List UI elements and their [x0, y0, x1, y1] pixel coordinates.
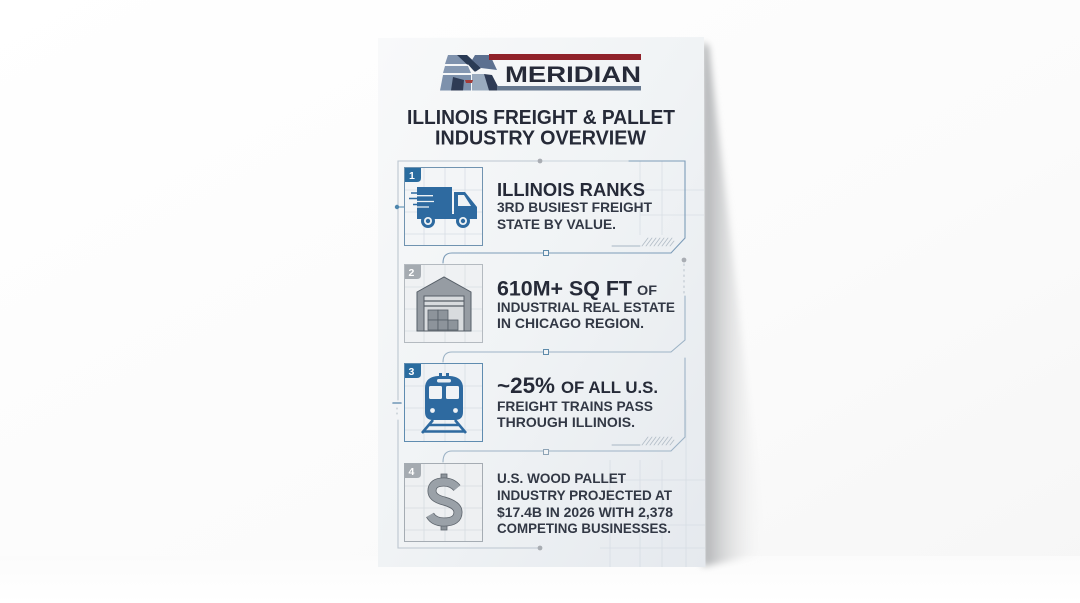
- circuit frame: [393, 161, 685, 548]
- text block 3: FREIGHT TRAINS PASS: [497, 398, 653, 414]
- text block 2: [497, 276, 675, 331]
- text block 2: INDUSTRIAL REAL ESTATE: [497, 299, 675, 315]
- badge 1: 1: [409, 170, 415, 182]
- icon: warehouse: [417, 277, 471, 331]
- icon: truck: [409, 187, 477, 228]
- panel 1: freight state: [404, 168, 652, 246]
- text block 2: IN CHICAGO REGION.: [497, 315, 644, 331]
- icon box 2: [404, 264, 482, 342]
- text block 1: ILLINOIS RANKS: [497, 179, 645, 200]
- icon: train: [422, 373, 466, 433]
- panel 2: real estate: [404, 264, 675, 342]
- text block 4: U.S. WOOD PALLET: [497, 470, 626, 486]
- icon: dollar sign: [430, 474, 458, 530]
- text block 4: COMPETING BUSINESSES.: [497, 520, 671, 536]
- logo: [440, 54, 641, 90]
- text block 3: ~25%: [497, 373, 555, 398]
- text block 4: $17.4B IN 2026 WITH 2,378: [497, 504, 673, 520]
- badge 4: 4: [408, 466, 414, 478]
- text block 4: INDUSTRY PROJECTED AT: [497, 487, 672, 503]
- logo red bar: [489, 54, 641, 60]
- panel 4: wood pallet: [404, 464, 673, 542]
- text block 3: OF ALL U.S.: [561, 378, 658, 397]
- text block 2: 610M+ SQ FT: [497, 276, 632, 300]
- text block 3: THROUGH ILLINOIS.: [497, 414, 635, 430]
- title: ILLINOIS FREIGHT & PALLET: [407, 106, 675, 129]
- poster shadow: [702, 42, 765, 566]
- title: INDUSTRY OVERVIEW: [435, 126, 647, 150]
- badge 2: 2: [408, 267, 414, 279]
- icon box 1: [404, 168, 482, 246]
- text block 3: [497, 373, 658, 430]
- frame nodes: [395, 159, 686, 550]
- logo mark: [440, 55, 500, 90]
- panel 3: freight trains: [404, 364, 658, 442]
- text block 1: 3RD BUSIEST FREIGHT: [497, 199, 652, 215]
- text block 2: OF: [637, 282, 657, 298]
- floor: [0, 556, 1080, 603]
- icon box 3: [404, 364, 482, 442]
- badge 3: 3: [408, 366, 414, 378]
- poster: [378, 37, 706, 567]
- icon box 4: [404, 464, 482, 542]
- text block 4: [497, 470, 673, 536]
- text block 1: STATE BY VALUE.: [497, 216, 616, 232]
- logo wordmark: MERIDIAN: [505, 62, 641, 87]
- logo blue bar: [497, 86, 641, 90]
- title: [407, 106, 675, 150]
- text block 1: [497, 179, 652, 232]
